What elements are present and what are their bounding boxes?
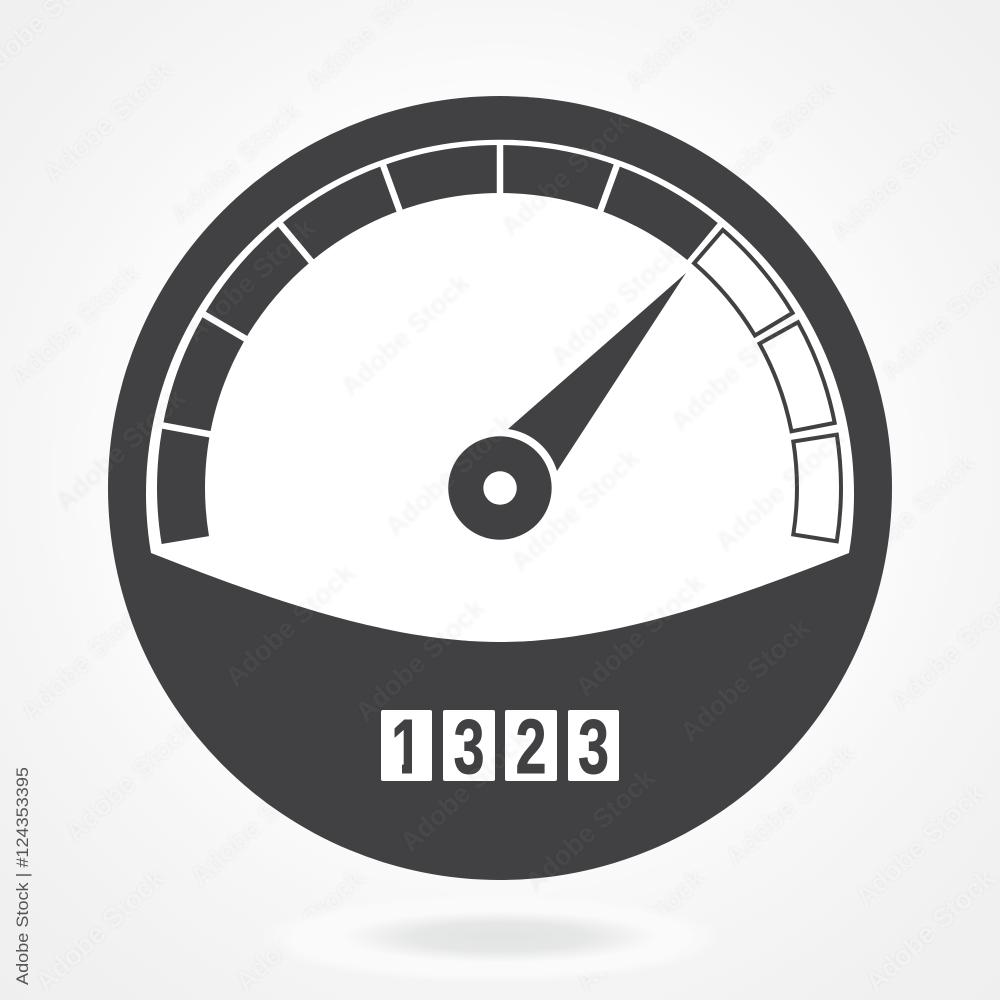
watermark pattern on background: Adobe Stock <box>719 738 861 872</box>
watermark pattern on background: Adobe Stock <box>849 778 991 912</box>
digit 2: 2 <box>516 704 546 790</box>
digit 3: 3 <box>454 704 484 790</box>
watermark pattern over gauge: Adobe Stock <box>394 723 536 857</box>
watermark pattern on background: Adobe Stock <box>229 863 371 997</box>
digit 1 <box>381 704 432 790</box>
watermark pattern over gauge: Adobe Stock <box>179 213 321 347</box>
watermark pattern on background: Adobe Stock <box>699 73 841 207</box>
watermark pattern over gauge: Adobe Stock <box>504 443 646 577</box>
stock id caption: Adobe Stock | #124353395 <box>13 767 32 985</box>
gauge <box>108 96 892 880</box>
watermark pattern over gauge: Adobe Stock <box>349 593 491 727</box>
needle hub <box>448 436 552 540</box>
watermark pattern over gauge: Adobe Stock <box>219 558 361 692</box>
watermark pattern over gauge: Adobe Stock <box>334 268 476 402</box>
watermark pattern on background: Adobe Stock <box>14 593 156 727</box>
gauge body disc <box>108 96 892 880</box>
watermark pattern on background: Adobe Stock <box>4 258 146 392</box>
watermark pattern over gauge: Adobe Stock <box>569 568 711 702</box>
watermark pattern on background: Adobe Stock <box>569 863 711 997</box>
watermark pattern on background: Adobe Stock <box>859 863 1000 997</box>
white dial face <box>146 140 854 642</box>
needle <box>508 273 686 471</box>
scale: filled segments <box>158 140 703 540</box>
digit 3 <box>568 704 619 790</box>
watermark pattern over gauge: Adobe Stock <box>519 763 661 897</box>
watermark pattern on background: Adobe Stock <box>29 863 171 997</box>
watermark pattern over gauge: Adobe Stock <box>709 423 851 557</box>
watermark pattern over gauge: Adobe Stock <box>494 108 636 242</box>
watermark pattern on background: Adobe Stock <box>59 713 201 847</box>
watermark pattern on background: Adobe Stock <box>164 96 306 230</box>
watermark pattern over gauge: Adobe Stock <box>674 613 816 747</box>
digit 1: 1 <box>391 704 422 790</box>
watermark pattern over gauge: Adobe Stock <box>379 408 521 542</box>
watermark pattern over gauge: Adobe Stock <box>664 303 806 437</box>
watermark pattern over gauge: Adobe Stock <box>49 383 191 517</box>
watermark pattern on background: Adobe Stock <box>37 55 179 189</box>
digit 3 <box>443 704 495 790</box>
watermark pattern on background: Adobe Stock <box>839 448 981 582</box>
watermark pattern over gauge: Adobe Stock <box>544 238 686 372</box>
digit 2 <box>505 704 557 790</box>
odometer counter <box>381 704 619 790</box>
watermark pattern on background: Adobe Stock <box>184 758 326 892</box>
watermark pattern on background: Adobe Stock <box>824 113 966 247</box>
digit 3: 3 <box>578 704 609 790</box>
ground shadow <box>258 894 722 982</box>
scale: empty outlined segments <box>694 230 841 541</box>
